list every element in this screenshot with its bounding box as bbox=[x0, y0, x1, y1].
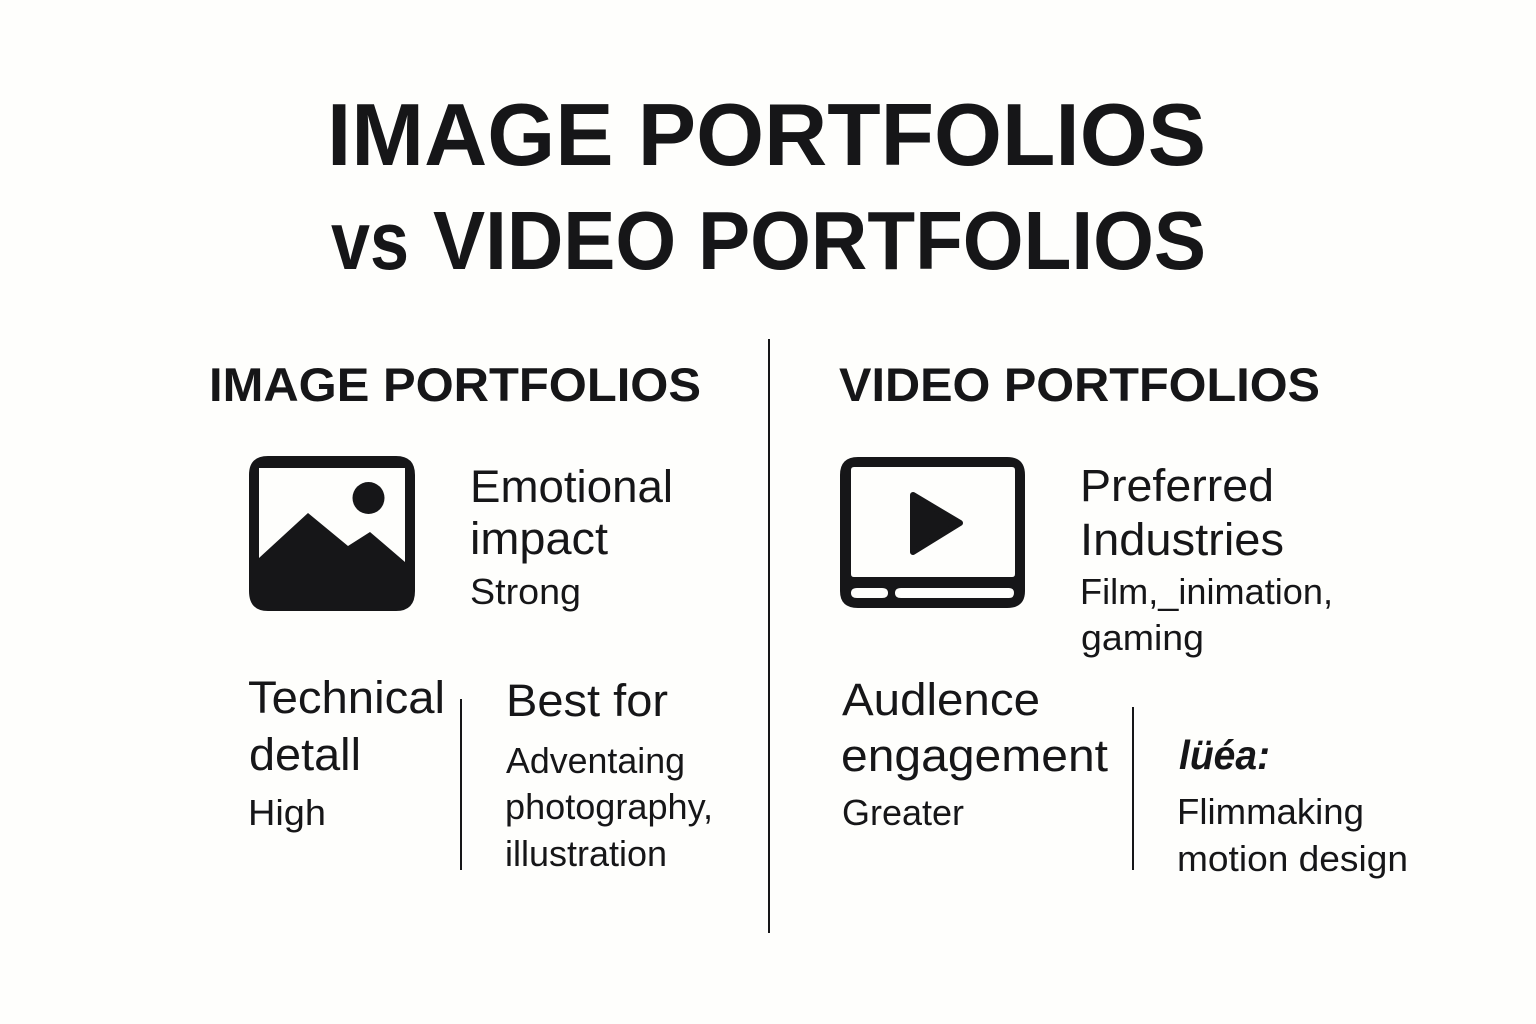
title bbox=[327, 85, 1206, 287]
heading: video portfolios: VIDEO PORTFOLIOS bbox=[839, 358, 1320, 411]
panel: image portfolios bbox=[209, 358, 713, 874]
text block: idea bbox=[1177, 732, 1408, 879]
text block: preferred industries bbox=[1080, 460, 1333, 658]
heading: image portfolios: IMAGE PORTFOLIOS bbox=[209, 358, 701, 411]
text block: emotional impact: impact bbox=[470, 513, 609, 564]
text block: idea: motion design bbox=[1177, 838, 1408, 879]
text block: emotional impact: Strong bbox=[470, 571, 581, 612]
text block: emotional impact: Emotional bbox=[470, 461, 673, 512]
divider: image details bbox=[460, 699, 462, 870]
text block: technical detail: detall bbox=[249, 729, 361, 780]
icon: video player bbox=[840, 457, 1025, 608]
text block: best for: Best for bbox=[506, 675, 668, 726]
text block: best for bbox=[505, 675, 713, 874]
center divider bbox=[768, 339, 770, 933]
icon: image bbox=[249, 456, 415, 611]
title: vs bbox=[331, 194, 409, 287]
title: VIDEO PORTFOLIOS bbox=[433, 194, 1206, 287]
text block: preferred industries: Film,_inimation, bbox=[1080, 571, 1333, 612]
text block: audience engagement bbox=[841, 674, 1109, 833]
text block: emotional impact bbox=[470, 461, 673, 612]
text block: technical detail: Technical bbox=[248, 672, 445, 723]
text block: audience engagement: Audlence bbox=[842, 674, 1040, 725]
text block: preferred industries: Preferred bbox=[1080, 460, 1274, 511]
text block: idea: Flimmaking bbox=[1177, 791, 1364, 832]
panel: video portfolios bbox=[839, 358, 1408, 879]
text block: best for: photography, bbox=[505, 786, 713, 827]
text block: technical detail: High bbox=[248, 792, 326, 833]
text block: preferred industries: Industries bbox=[1080, 514, 1284, 565]
text block: audience engagement: Greater bbox=[842, 792, 964, 833]
text block: preferred industries: gaming bbox=[1081, 617, 1204, 658]
text block: technical detail bbox=[248, 672, 445, 833]
title: IMAGE PORTFOLIOS bbox=[327, 85, 1206, 184]
text block: best for: illustration bbox=[505, 833, 667, 874]
text block: best for: Adventaing bbox=[506, 740, 685, 781]
text block: idea: lüéa: bbox=[1179, 732, 1270, 778]
divider: video details bbox=[1132, 707, 1134, 870]
text block: audience engagement: engagement bbox=[841, 730, 1109, 781]
